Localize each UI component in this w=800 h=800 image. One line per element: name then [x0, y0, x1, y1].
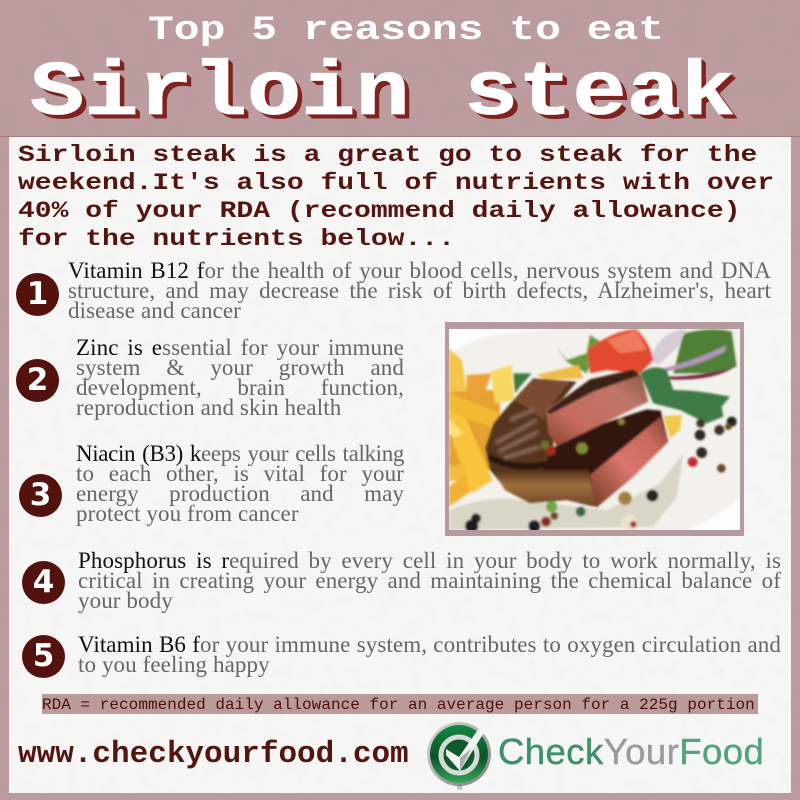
reason 4: text: your body: [78, 588, 173, 613]
reason 2: text: development, brain function,: [76, 375, 404, 400]
sear highlights: [495, 410, 540, 458]
reason 2: text: system & your growth and: [76, 355, 404, 380]
reason 2: number badge: 2: [27, 362, 48, 398]
lower slice: [543, 409, 668, 507]
reason 5: text: Vitamin B6 for your immune system, contributes to oxygen circulation and: [78, 632, 781, 657]
reason 3: text: [76, 441, 404, 526]
fries: [449, 390, 500, 470]
intro text block: for the nutrients below...: [18, 226, 455, 252]
intro text block: 40% of your RDA (recommend daily allowance): [18, 198, 741, 224]
salad: [673, 330, 737, 373]
reason 2: text: reproduction and skin health: [76, 395, 341, 420]
reason 3: text: Niacin (B3) keeps your cells talking: [76, 441, 404, 466]
intro text block: weekend.It's also full of nutrients with over: [18, 170, 774, 196]
steak base sear: [485, 378, 593, 507]
reason 1: number badge: [16, 273, 59, 316]
reason 4: text: critical in creating your energy and maintaining the chemical balance of: [78, 568, 781, 593]
tomato: [588, 329, 653, 373]
reason 4: number badge: 4: [33, 564, 54, 600]
steak photo with frame: [445, 322, 744, 536]
steak photo illustration: [449, 329, 740, 530]
website address: www.checkyourfood.com: [18, 737, 409, 772]
reason 5: text: to you feeling happy: [78, 652, 270, 677]
reason 1: number badge: 1: [27, 276, 48, 312]
reason 3: text: protect you from cancer: [76, 501, 299, 526]
reason 5: text: [78, 632, 781, 677]
reason 2: number badge: [16, 359, 59, 402]
reason 2: text: [76, 335, 404, 420]
reason 3: text: energy production and may: [76, 481, 404, 506]
icon: CheckYourFood logo mark: [427, 722, 491, 792]
reason 1: text: disease and cancer: [68, 298, 241, 323]
reason 1: text: Vitamin B12 for the health of your blood cells, nervous system and DNA: [68, 258, 771, 283]
reason 4: text: Phosphorus is required by every cell in your body to work normally, is: [78, 548, 781, 573]
reason 4: number badge: [22, 561, 65, 604]
reason 3: number badge: 3: [30, 477, 51, 513]
reason 3: text: to each other, is vital for your: [76, 461, 404, 486]
intro text block: [18, 142, 774, 252]
header band: [0, 0, 800, 137]
reason 5: number badge: 5: [33, 638, 54, 674]
reason 3: number badge: [19, 474, 62, 517]
RDA footnote bar: RDA = recommended daily allowance for an average person for a 225g portion: [42, 696, 755, 714]
CheckYourFood wordmark: CheckYourFood: [498, 731, 764, 772]
reason 1: text: structure, and may decrease the risk of birth defects, Alzheimer's, heart: [68, 278, 771, 303]
reason 4: text: [78, 548, 781, 613]
title line 2: Sirloin steak: [30, 51, 735, 138]
reason 1: text: [68, 258, 771, 323]
peppercorns: [576, 443, 588, 454]
plate: [449, 329, 553, 377]
reason 2: text: Zinc is essential for your immune: [76, 335, 404, 360]
intro text block: Sirloin steak is a great go to steak for the: [18, 142, 757, 168]
icon: CheckYourFood logo mark: ®: [457, 784, 463, 792]
title line 1: Top 5 reasons to eat: [148, 10, 664, 49]
reason 5: number badge: [22, 635, 65, 678]
upper slice: [546, 370, 648, 446]
